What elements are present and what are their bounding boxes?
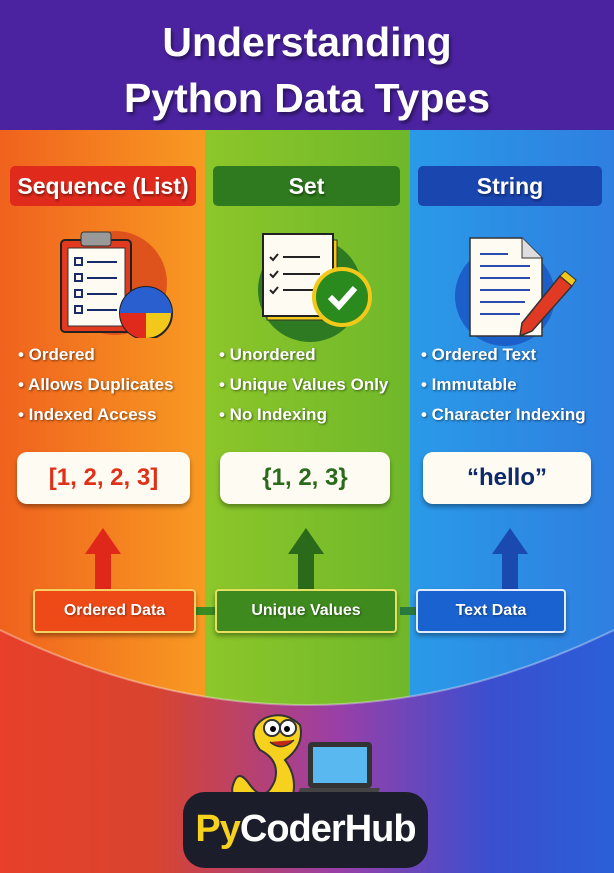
value: list: [1, 2, 2, 3] bbox=[49, 464, 158, 491]
bullets: list: • Ordered bbox=[18, 345, 95, 364]
header: Set bbox=[213, 166, 400, 206]
bullets: list: • Allows Duplicates bbox=[18, 375, 174, 394]
icon: document with pencil bbox=[455, 237, 577, 346]
value: list bbox=[17, 452, 190, 504]
header: Sequence (List) bbox=[10, 166, 196, 206]
header: Sequence (List): Sequence (List) bbox=[17, 173, 189, 199]
title band bbox=[0, 0, 614, 130]
bullets: string: • Ordered Text bbox=[421, 345, 536, 364]
bullets: list: • Indexed Access bbox=[18, 405, 157, 424]
icon: clipboard bbox=[60, 231, 173, 338]
value: string bbox=[423, 452, 591, 504]
title bbox=[124, 19, 492, 126]
box: Unique Values bbox=[215, 589, 397, 633]
title: Python Data Types bbox=[124, 75, 490, 121]
box: Ordered Data bbox=[33, 589, 196, 633]
bullets: set: • No Indexing bbox=[219, 405, 327, 424]
title: Understanding bbox=[162, 19, 452, 65]
header: String: String bbox=[477, 173, 543, 199]
column area with arc bbox=[0, 130, 614, 706]
box: Unique Values: Unique Values bbox=[251, 602, 361, 619]
box: Ordered Data: Ordered Data bbox=[64, 602, 165, 619]
header: Set: Set bbox=[289, 173, 324, 199]
bullets: string: • Immutable bbox=[421, 375, 517, 394]
bullets: string: • Character Indexing bbox=[421, 405, 586, 424]
bullets: set: • Unordered bbox=[219, 345, 316, 364]
box: Text Data bbox=[416, 589, 566, 633]
logo: PyCoderHub badge bbox=[183, 792, 428, 868]
logo: PyCoderHub badge: PyCoderHub bbox=[195, 808, 416, 850]
bullets: string bbox=[421, 345, 587, 426]
box: Text Data: Text Data bbox=[456, 602, 526, 619]
value: set bbox=[220, 452, 390, 504]
value: string: “hello” bbox=[467, 464, 547, 491]
logo: snake with laptop bbox=[231, 714, 380, 792]
bullets: list bbox=[18, 345, 176, 424]
bullets: set: • Unique Values Only bbox=[219, 375, 388, 394]
arrows bbox=[85, 528, 528, 615]
value: set: {1, 2, 3} bbox=[262, 464, 348, 491]
header: String bbox=[418, 166, 602, 206]
icon: checklist notepad bbox=[258, 233, 372, 342]
bullets: set bbox=[219, 345, 390, 426]
